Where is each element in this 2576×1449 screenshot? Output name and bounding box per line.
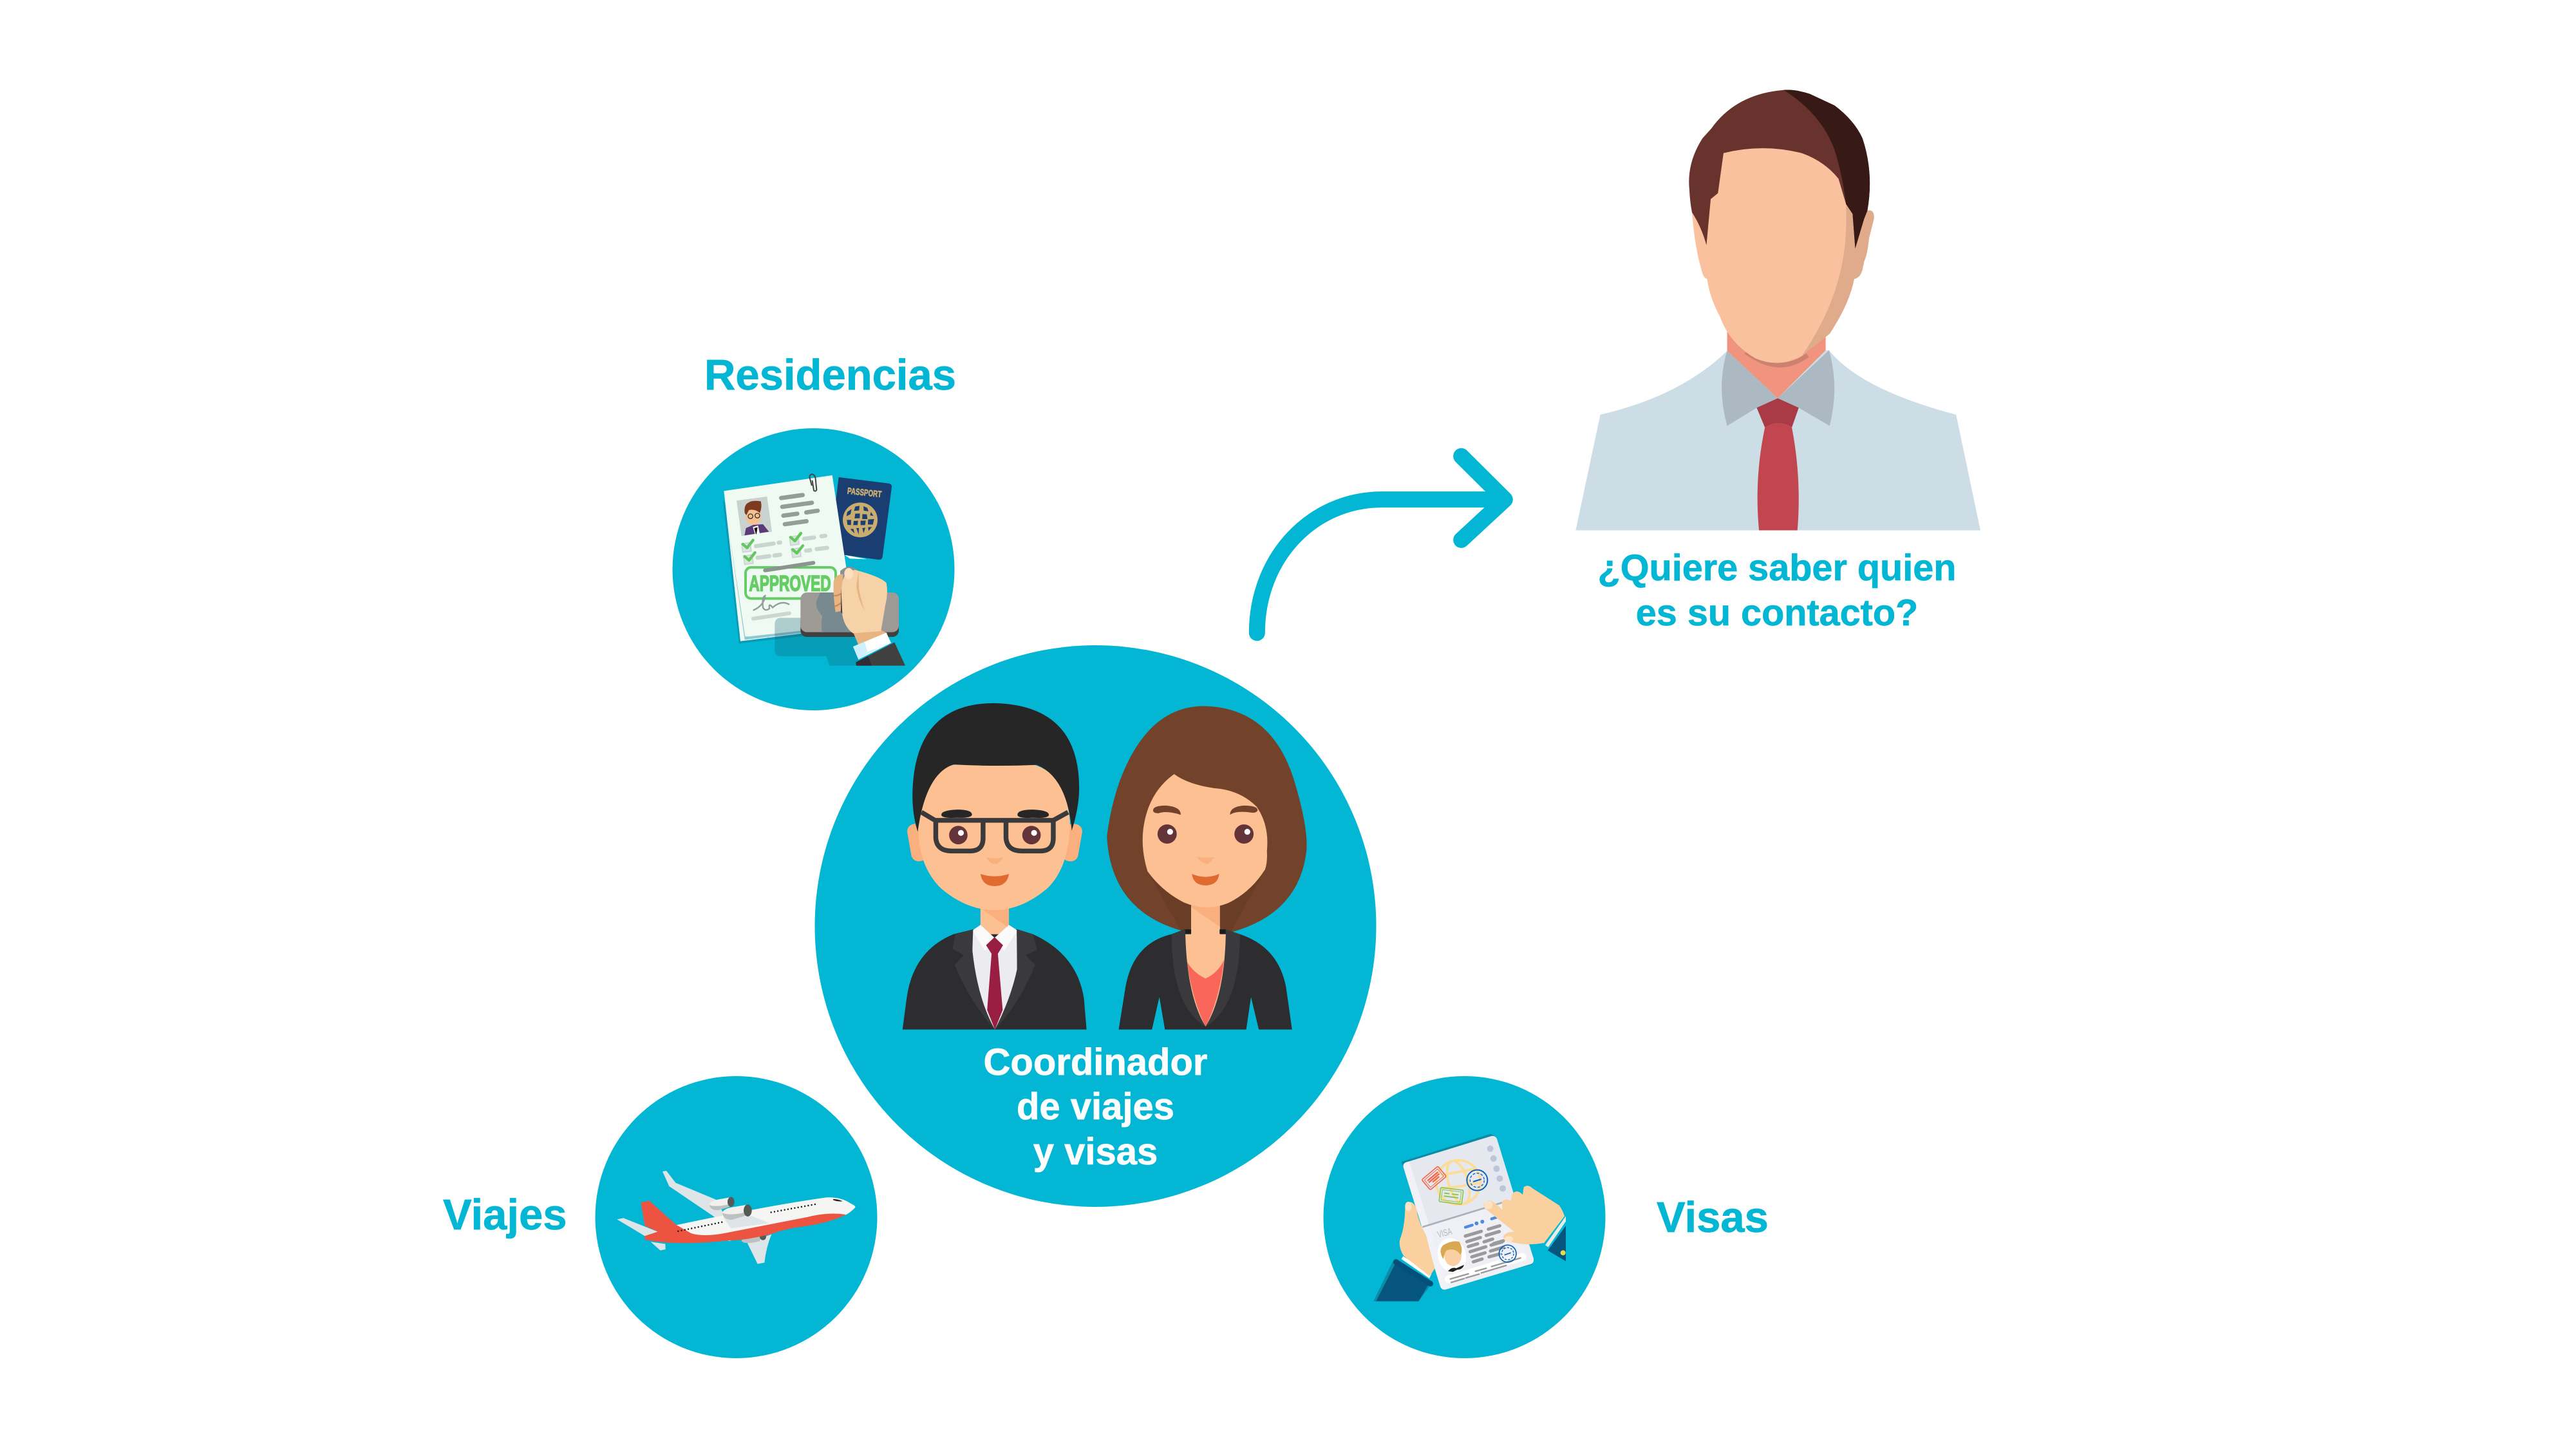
tie knot: [1756, 398, 1799, 428]
document page: [724, 475, 855, 641]
machine readable zone: [1449, 1257, 1523, 1282]
signature: [753, 563, 813, 619]
label: Coordinador de viajes y visas: y visas: [1033, 1131, 1158, 1173]
globe watermark: [1436, 1159, 1480, 1206]
stamp impression: APPROVED: [746, 567, 836, 598]
icon: airplane: [617, 1171, 855, 1264]
hair shadow: [1783, 90, 1870, 249]
passport details: [1436, 1213, 1510, 1262]
figure: contact person silhouette: [1575, 90, 1980, 530]
hair: [1689, 90, 1870, 249]
label: Coordinador de viajes y visas: Coordinador: [984, 1041, 1207, 1083]
stamp impression: APPROVED: APPROVED: [749, 572, 831, 596]
tie: [1758, 423, 1799, 530]
text: contact question: ¿Quiere saber quien: [1598, 547, 1956, 589]
document text lines: [781, 495, 818, 524]
open passport: [1402, 1134, 1534, 1289]
icon: paperclip: [809, 474, 816, 491]
label: Coordinador de viajes y visas: [984, 1041, 1207, 1173]
heading: Viajes: Viajes: [443, 1191, 567, 1239]
heading: Visas: Visas: [1657, 1193, 1769, 1242]
shirt collar: [1722, 350, 1834, 426]
page holes: [1487, 1146, 1506, 1191]
panel: Viajes circle with airplane: [595, 1076, 877, 1358]
shirt: [1575, 350, 1980, 530]
document shadow: [723, 500, 855, 643]
chin shadow: [1746, 352, 1808, 365]
icon: hand holding stamp: [834, 568, 887, 645]
blue round stamp: [1499, 1245, 1516, 1262]
label: Coordinador de viajes y visas: de viajes: [1017, 1086, 1174, 1128]
right hand and sleeve: [1483, 1186, 1566, 1261]
stamp shadow: [775, 618, 858, 666]
neck: [1727, 324, 1826, 398]
arrow: [1257, 456, 1505, 633]
panel: central coordinator circle: [815, 645, 1377, 1207]
photo of applicant: [737, 497, 772, 536]
photo: [1433, 1235, 1471, 1276]
heading: Residencias: Residencias: [704, 351, 956, 399]
face: [1692, 140, 1847, 363]
icon: passport: [836, 477, 892, 560]
icon: rubber stamp: [800, 567, 899, 637]
panel: Visas circle with passport pages: [1324, 1076, 1606, 1358]
left hand and sleeve: [1373, 1202, 1434, 1302]
face shading and ear: [1782, 202, 1874, 356]
visa stamps: [1422, 1166, 1487, 1204]
text: contact question: es su contacto?: [1636, 592, 1918, 634]
sleeve and cuff: [853, 632, 905, 666]
panel: Residencias circle with approved document: [672, 428, 954, 710]
icon: passport: PASSPORT: [847, 486, 882, 499]
passport details: VISA: [1436, 1227, 1453, 1240]
text: contact question: [1598, 547, 1956, 634]
checklist: [742, 533, 827, 565]
figure: male coordinator: [903, 703, 1087, 1030]
figure: female coordinator: [1107, 706, 1307, 1030]
